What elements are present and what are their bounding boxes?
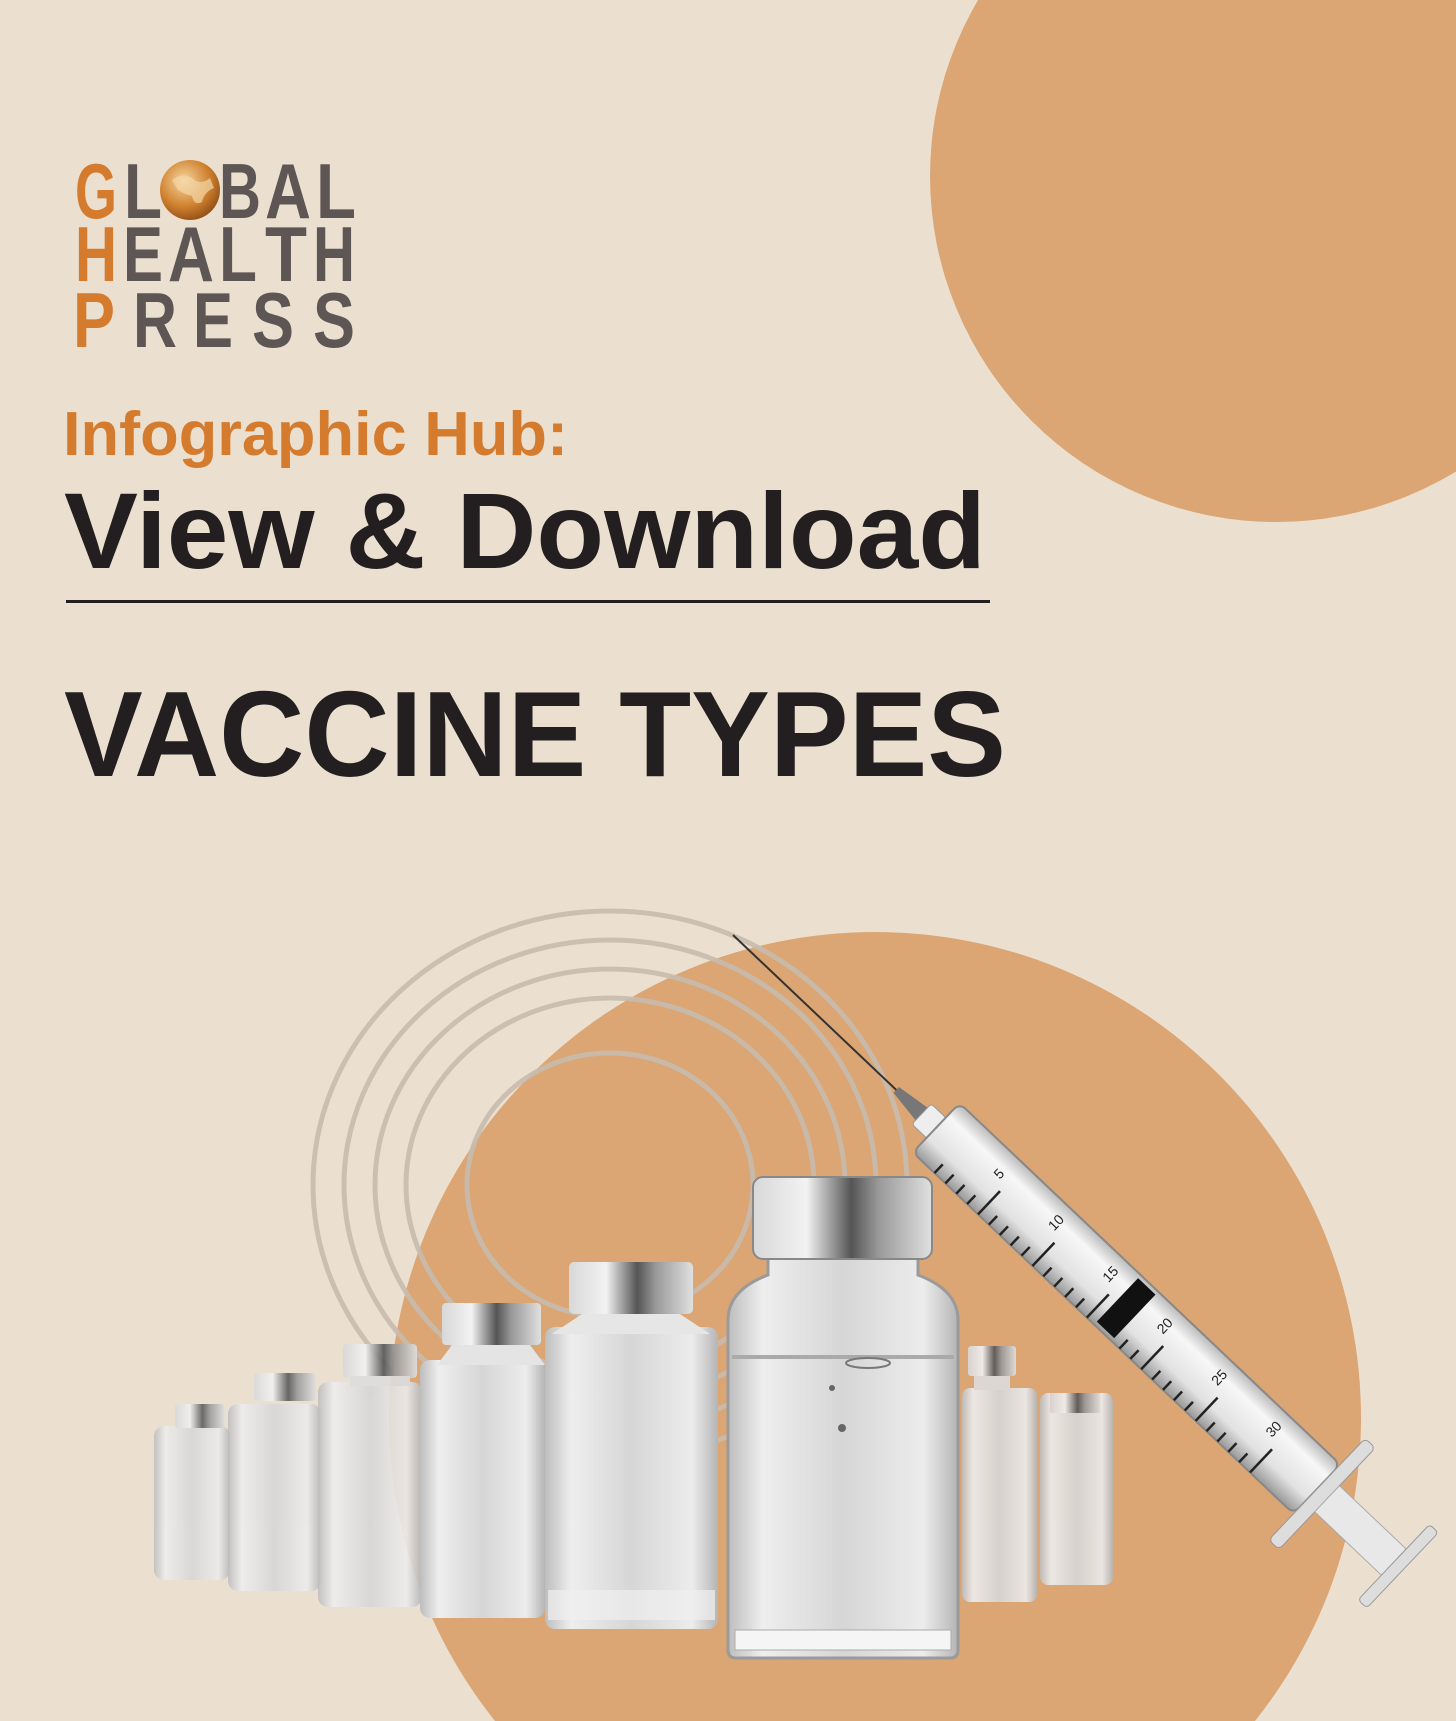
syringe: 20 xyxy=(1153,1314,1176,1337)
logo: L xyxy=(316,147,356,235)
subtitle: Infographic Hub: Infographic Hub: xyxy=(63,400,568,469)
logo: S xyxy=(252,276,294,364)
flange and plunger rod xyxy=(1269,1438,1375,1550)
syringe: 30 xyxy=(1262,1418,1285,1440)
logo: G xyxy=(75,147,117,235)
logo xyxy=(73,147,356,364)
logo: E xyxy=(123,210,163,298)
vial: right back 2 xyxy=(1040,1393,1113,1585)
logo: R xyxy=(133,276,177,364)
vial 2 xyxy=(545,1262,718,1629)
vials group xyxy=(154,1177,1113,1658)
logo: A xyxy=(265,147,311,235)
decorative circle: bottom xyxy=(389,932,1361,1721)
vial 1: large xyxy=(728,1177,958,1658)
decorative circle: top right xyxy=(930,0,1456,522)
plunger seal xyxy=(1097,1278,1156,1338)
heading: View & Download: View & Download xyxy=(64,470,986,591)
logo: B xyxy=(219,147,261,235)
concentric rings xyxy=(313,911,907,1459)
logo: H xyxy=(313,210,355,298)
title: VACCINE TYPES: VACCINE TYPES xyxy=(64,666,1006,802)
syringe: 10 xyxy=(1045,1211,1067,1234)
logo: A xyxy=(168,210,214,298)
logo: S xyxy=(313,276,355,364)
logo: T xyxy=(265,210,307,298)
needle xyxy=(733,935,901,1095)
ticks xyxy=(934,1150,1272,1472)
vial 6 xyxy=(154,1404,230,1580)
underline xyxy=(66,600,990,603)
vial 5 xyxy=(228,1373,321,1591)
barrel xyxy=(913,1103,1340,1514)
logo: H xyxy=(75,210,117,298)
syringe: 5 xyxy=(990,1165,1007,1182)
syringe: 15 xyxy=(1099,1263,1122,1285)
icon: globe xyxy=(160,160,220,220)
logo: P xyxy=(73,276,115,364)
logo: L xyxy=(124,147,162,235)
syringe xyxy=(685,884,1451,1621)
vial 3 xyxy=(420,1303,545,1618)
vial: right back 1 xyxy=(962,1346,1037,1602)
logo: L xyxy=(219,210,257,298)
logo: E xyxy=(193,276,233,364)
vial 4 xyxy=(318,1344,422,1607)
syringe: 25 xyxy=(1208,1366,1230,1388)
